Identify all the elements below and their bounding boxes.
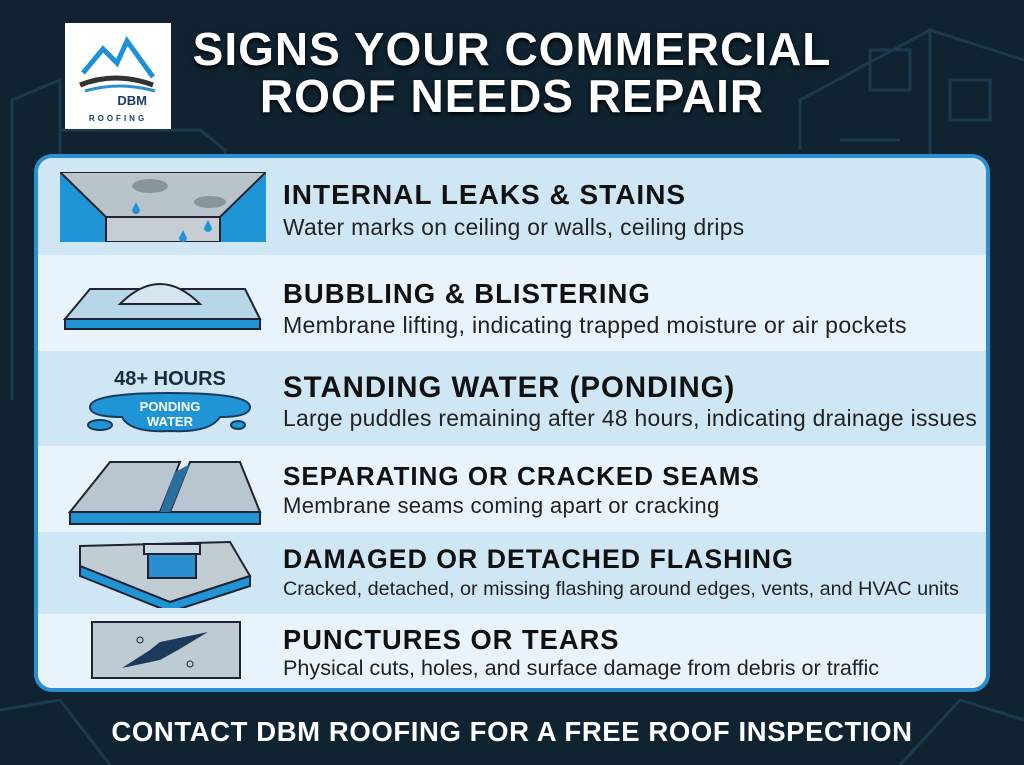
row: internal leaks: INTERNAL LEAKS & STAINS	[283, 179, 686, 210]
icon: ponding water: WATER	[147, 414, 194, 429]
logo: ROOFING	[89, 114, 147, 123]
row: flashing	[38, 532, 986, 614]
icon: ceiling leak	[60, 172, 266, 242]
row: bubbling: Membrane lifting, indicating trapped moisture or air pockets	[283, 312, 907, 338]
icon: blister	[62, 283, 262, 330]
row: flashing: Cracked, detached, or missing flashing around edges, vents, and HVAC units	[283, 578, 959, 600]
row: internal leaks: Water marks on ceiling or walls, ceiling drips	[283, 214, 744, 240]
row: seams: Membrane seams coming apart or cracking	[283, 493, 720, 518]
row: ponding: Large puddles remaining after 48 hours, indicating drainage issues	[283, 405, 977, 431]
row: internal leaks	[38, 158, 986, 255]
panel: signs list	[34, 154, 990, 692]
title	[193, 23, 831, 122]
logo: DBM	[117, 93, 147, 108]
icon: ponding water: PONDING	[140, 399, 200, 414]
row: punctures	[38, 614, 986, 696]
row: punctures: Physical cuts, holes, and surface damage from debris or traffic	[283, 655, 879, 680]
row: ponding	[38, 351, 986, 446]
row: flashing: DAMAGED OR DETACHED FLASHING	[283, 544, 794, 574]
logo	[65, 23, 171, 129]
icon: flashing	[79, 541, 252, 608]
row: bubbling: BUBBLING & BLISTERING	[283, 278, 651, 309]
row: seams	[38, 446, 986, 532]
row: bubbling	[38, 255, 986, 351]
title: ROOF NEEDS REPAIR	[260, 70, 764, 122]
footer call to action: CONTACT DBM ROOFING FOR A FREE ROOF INSPECTION	[111, 716, 913, 747]
row: ponding: STANDING WATER (PONDING)	[283, 371, 735, 404]
icon: cracked seam	[68, 461, 262, 525]
icon: ponding water: 48+ HOURS	[114, 368, 226, 390]
icon: puncture	[91, 621, 241, 679]
row: seams: SEPARATING OR CRACKED SEAMS	[283, 461, 760, 491]
title: SIGNS YOUR COMMERCIAL	[193, 23, 831, 75]
icon: ponding water	[87, 368, 251, 432]
row: punctures: PUNCTURES OR TEARS	[283, 624, 620, 655]
